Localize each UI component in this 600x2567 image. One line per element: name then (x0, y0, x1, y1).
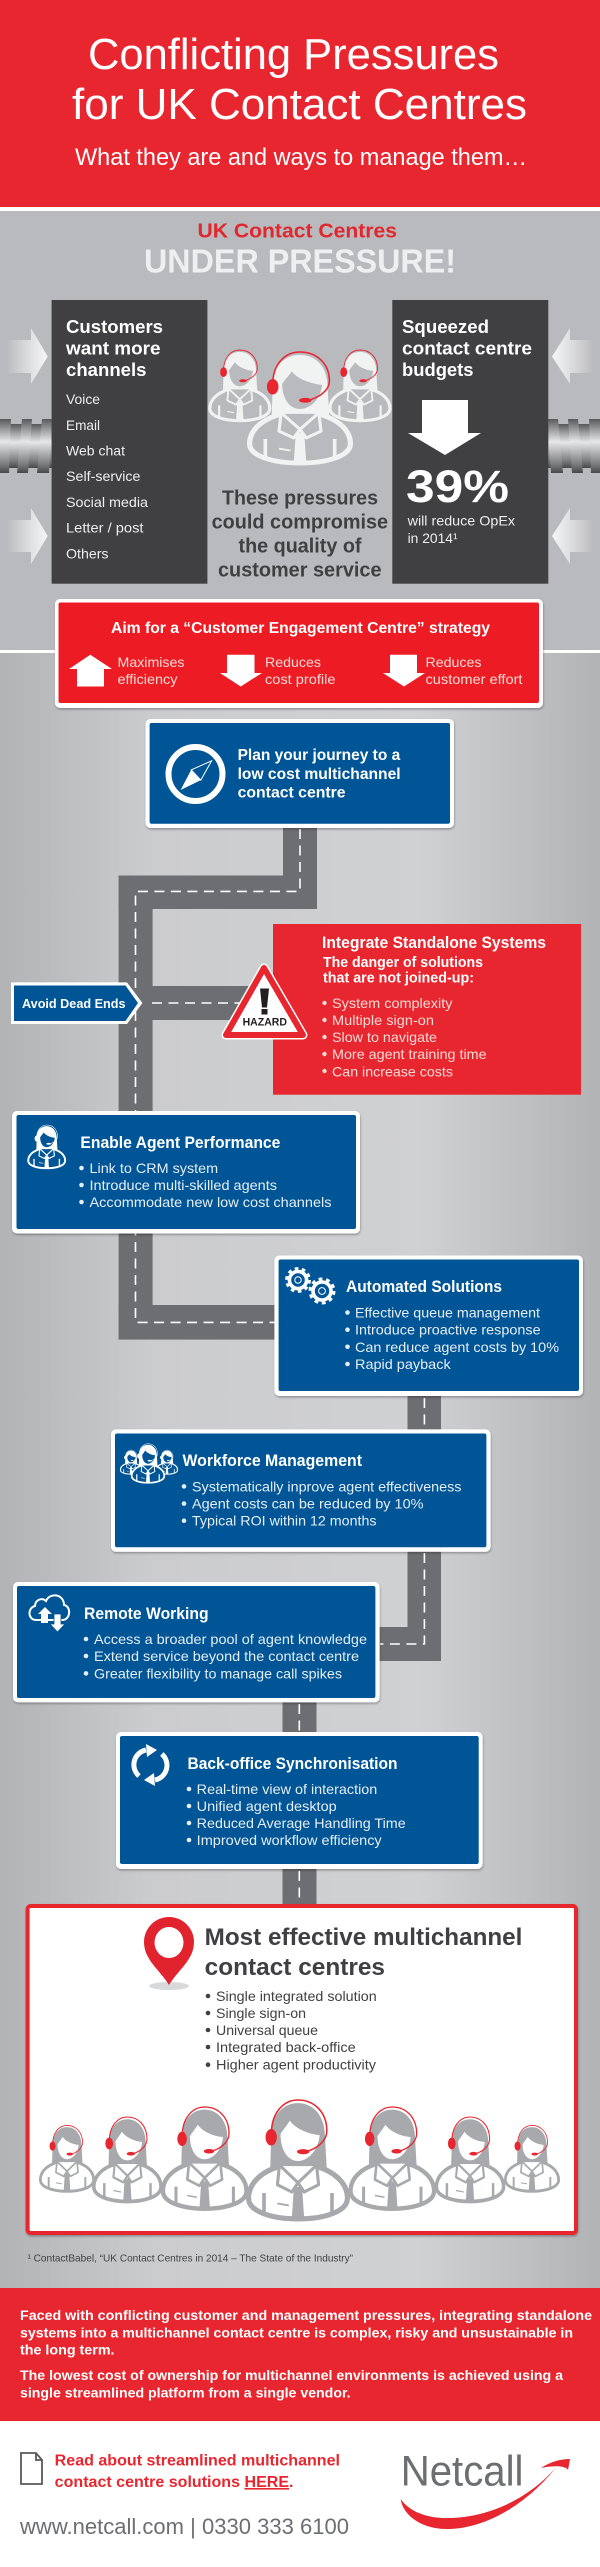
integrate bullets: Slow to navigate (332, 1029, 437, 1045)
logo: netcall (401, 2448, 570, 2529)
heading: squeezed: Squeezed (402, 317, 489, 337)
panel: back-office synchronisation (116, 1732, 483, 1869)
panel: conclusion: Faced with conflicting customer and management pressures, integrating standalone (20, 2307, 592, 2323)
panel: plan your journey (146, 719, 454, 828)
channel list: Web chat (66, 442, 125, 458)
back-office bullets: Real-time view of interaction (197, 1781, 377, 1797)
heading: most effective (205, 1924, 522, 1981)
integrate subheading: The danger of solutions (323, 955, 483, 971)
enable bullets: Accommodate new low cost channels (90, 1194, 332, 1210)
remote bullets: Access a broader pool of agent knowledge (94, 1631, 367, 1647)
icon: sync arrows (134, 1744, 167, 1786)
icon: agent team (120, 1444, 178, 1483)
heading: customers: channels (66, 360, 146, 380)
title (72, 30, 527, 129)
automated bullets (345, 1305, 559, 1372)
automated bullets: Rapid payback (355, 1356, 452, 1372)
icon: document (21, 2453, 42, 2484)
workforce bullets: Systematically inprove agent effectiveness (192, 1478, 461, 1494)
back-office bullets: Unified agent desktop (197, 1798, 337, 1814)
channel list: Self-service (66, 468, 141, 484)
heading: customers: want more (65, 338, 160, 358)
channel list (66, 391, 148, 561)
workforce bullets (182, 1478, 461, 1529)
panel: remote working (13, 1582, 380, 1702)
channel list: Others (66, 545, 108, 561)
integrate bullets: Can increase costs (332, 1063, 453, 1079)
plan text: Plan your journey to a (238, 747, 400, 764)
sign: avoid dead ends (11, 982, 142, 1024)
automated bullets: Effective queue management (355, 1305, 540, 1321)
text: pressures compromise quality: could compromise (212, 512, 388, 534)
title: for UK Contact Centres (72, 80, 527, 129)
heading: customers (65, 317, 163, 380)
remote bullets (84, 1631, 367, 1681)
panel: customer engagement centre strategy (55, 599, 543, 708)
most effective bullets: Single sign-on (216, 2005, 306, 2021)
header banner (0, 0, 600, 211)
plan text: low cost multichannel (238, 766, 401, 783)
item: reduces cost profile (220, 654, 336, 687)
section heading: under pressure: UK Contact Centres (198, 220, 397, 242)
call to action: contact centre solutions HERE. (55, 2474, 294, 2491)
back-office bullets: Reduced Average Handling Time (197, 1815, 406, 1831)
heading: squeezed: budgets (402, 360, 474, 380)
icon: three agents (210, 350, 390, 463)
remote bullets: Greater flexibility to manage call spikes (94, 1665, 342, 1681)
text: pressures compromise quality: These pressures (222, 488, 378, 510)
text: pressures compromise quality (212, 488, 388, 581)
integrate bullets: System complexity (332, 995, 452, 1011)
enable heading: Enable Agent Performance (80, 1134, 280, 1152)
remote bullets: Extend service beyond the contact centre (94, 1648, 359, 1664)
workforce heading: Workforce Management (182, 1452, 362, 1470)
icon: gears (287, 1269, 334, 1303)
item: reduces customer effort (383, 654, 523, 687)
panel: conclusion: single streamlined platform from a single vendor. (20, 2385, 351, 2401)
icon: cloud transfer (29, 1595, 69, 1632)
heading: squeezed (402, 317, 532, 380)
stat caption: in 2014¹ (408, 530, 458, 546)
footer background (0, 2421, 600, 2567)
panel: conclusion: The lowest cost of ownership for multichannel environments is achieved using a (20, 2367, 563, 2383)
item: reduces cost profile: cost profile (265, 671, 336, 687)
back-office heading: Back-office Synchronisation (188, 1755, 398, 1773)
sign: avoid dead ends: Avoid Dead Ends (22, 996, 126, 1011)
back-office bullets: Improved workflow efficiency (197, 1832, 382, 1848)
contact details: www.netcall.com | 0330 333 6100 (19, 2514, 349, 2539)
integrate bullets: More agent training time (332, 1046, 487, 1062)
text: pressures compromise quality: customer service (218, 559, 382, 581)
heading: squeezed: contact centre (402, 338, 532, 358)
panel: conclusion (0, 2288, 600, 2421)
call to action (55, 2453, 340, 2491)
integrate bullets: Multiple sign-on (332, 1012, 434, 1028)
integrate bullets (322, 995, 487, 1079)
enable bullets (79, 1160, 332, 1210)
panel: workforce management (111, 1429, 491, 1552)
text: pressures compromise quality: the quality of (238, 536, 362, 558)
section heading: under pressure: UNDER PRESSURE! (144, 242, 456, 280)
item: reduces customer effort: Reduces (426, 654, 482, 670)
stat caption (407, 513, 515, 546)
icon: row of seven agents (40, 2100, 559, 2219)
enable bullets: Link to CRM system (90, 1160, 218, 1176)
heading: most effective: Most effective multichannel (205, 1924, 522, 1951)
pressure arrows and pipes (0, 328, 600, 564)
section heading: under pressure (144, 220, 456, 280)
most effective bullets (206, 1988, 377, 2073)
heading: customers: Customers (66, 317, 163, 337)
title: Conflicting Pressures (88, 30, 499, 79)
icon: agent (28, 1125, 65, 1168)
subtitle: What they are and ways to manage them… (75, 144, 527, 171)
icon: hazard sign: HAZARD (243, 1017, 287, 1029)
channel list: Letter / post (66, 520, 144, 536)
most effective bullets: Single integrated solution (216, 1988, 377, 2004)
automated bullets: Can reduce agent costs by 10% (355, 1339, 559, 1355)
channel list: Voice (66, 391, 100, 407)
panel: squeezed budgets (392, 300, 548, 584)
call to action: Read about streamlined multichannel (55, 2453, 340, 2470)
panel: conclusion: the long term. (20, 2342, 114, 2358)
channel list: Social media (66, 494, 148, 510)
stat: 39 percent: 39% (406, 461, 509, 512)
workforce bullets: Agent costs can be reduced by 10% (192, 1496, 424, 1512)
logo: netcall: Netcall (401, 2448, 524, 2496)
panel: customers want more channels (52, 300, 207, 584)
enable bullets: Introduce multi-skilled agents (90, 1177, 277, 1193)
workforce bullets: Typical ROI within 12 months (192, 1513, 376, 1529)
stat caption: will reduce OpEx (407, 513, 515, 529)
item: maximises efficiency: efficiency (118, 671, 178, 687)
channel list: Email (66, 417, 100, 433)
panel: enable agent performance (12, 1111, 360, 1234)
icon: location pin (144, 1917, 194, 1990)
most effective bullets: Higher agent productivity (216, 2057, 376, 2073)
integrate subheading (323, 955, 483, 986)
icon: down arrow (408, 400, 481, 455)
heading: most effective: contact centres (205, 1954, 385, 1981)
item: maximises efficiency (69, 654, 184, 687)
footnote: ¹ ContactBabel, “UK Contact Centres in 2014 – The State of the Industry” (28, 2252, 353, 2264)
panel: integrate standalone systems (273, 924, 581, 1095)
strategy heading: Aim for a “Customer Engagement Centre” strategy (111, 620, 490, 637)
remote heading: Remote Working (84, 1605, 209, 1623)
most effective bullets: Universal queue (216, 2022, 318, 2038)
plan text: contact centre (238, 785, 346, 802)
integrate heading: Integrate Standalone Systems (322, 934, 546, 952)
icon: compass (168, 747, 222, 801)
plan text (238, 747, 401, 802)
panel: automated solutions (274, 1256, 583, 1396)
automated bullets: Introduce proactive response (355, 1322, 541, 1338)
item: reduces customer effort: customer effort (426, 671, 523, 687)
panel: conclusion: systems into a multichannel contact centre is complex, risky and unsustainable in (20, 2325, 573, 2341)
item: reduces cost profile: Reduces (265, 654, 321, 670)
panel: most effective contact centres (28, 1906, 576, 2233)
automated heading: Automated Solutions (346, 1278, 502, 1296)
item: maximises efficiency: Maximises (118, 654, 184, 670)
most effective bullets: Integrated back-office (216, 2039, 356, 2055)
back-office bullets (187, 1781, 406, 1848)
road network (119, 825, 441, 1907)
integrate subheading: that are not joined-up: (323, 970, 474, 986)
icon: hazard sign (226, 968, 303, 1035)
